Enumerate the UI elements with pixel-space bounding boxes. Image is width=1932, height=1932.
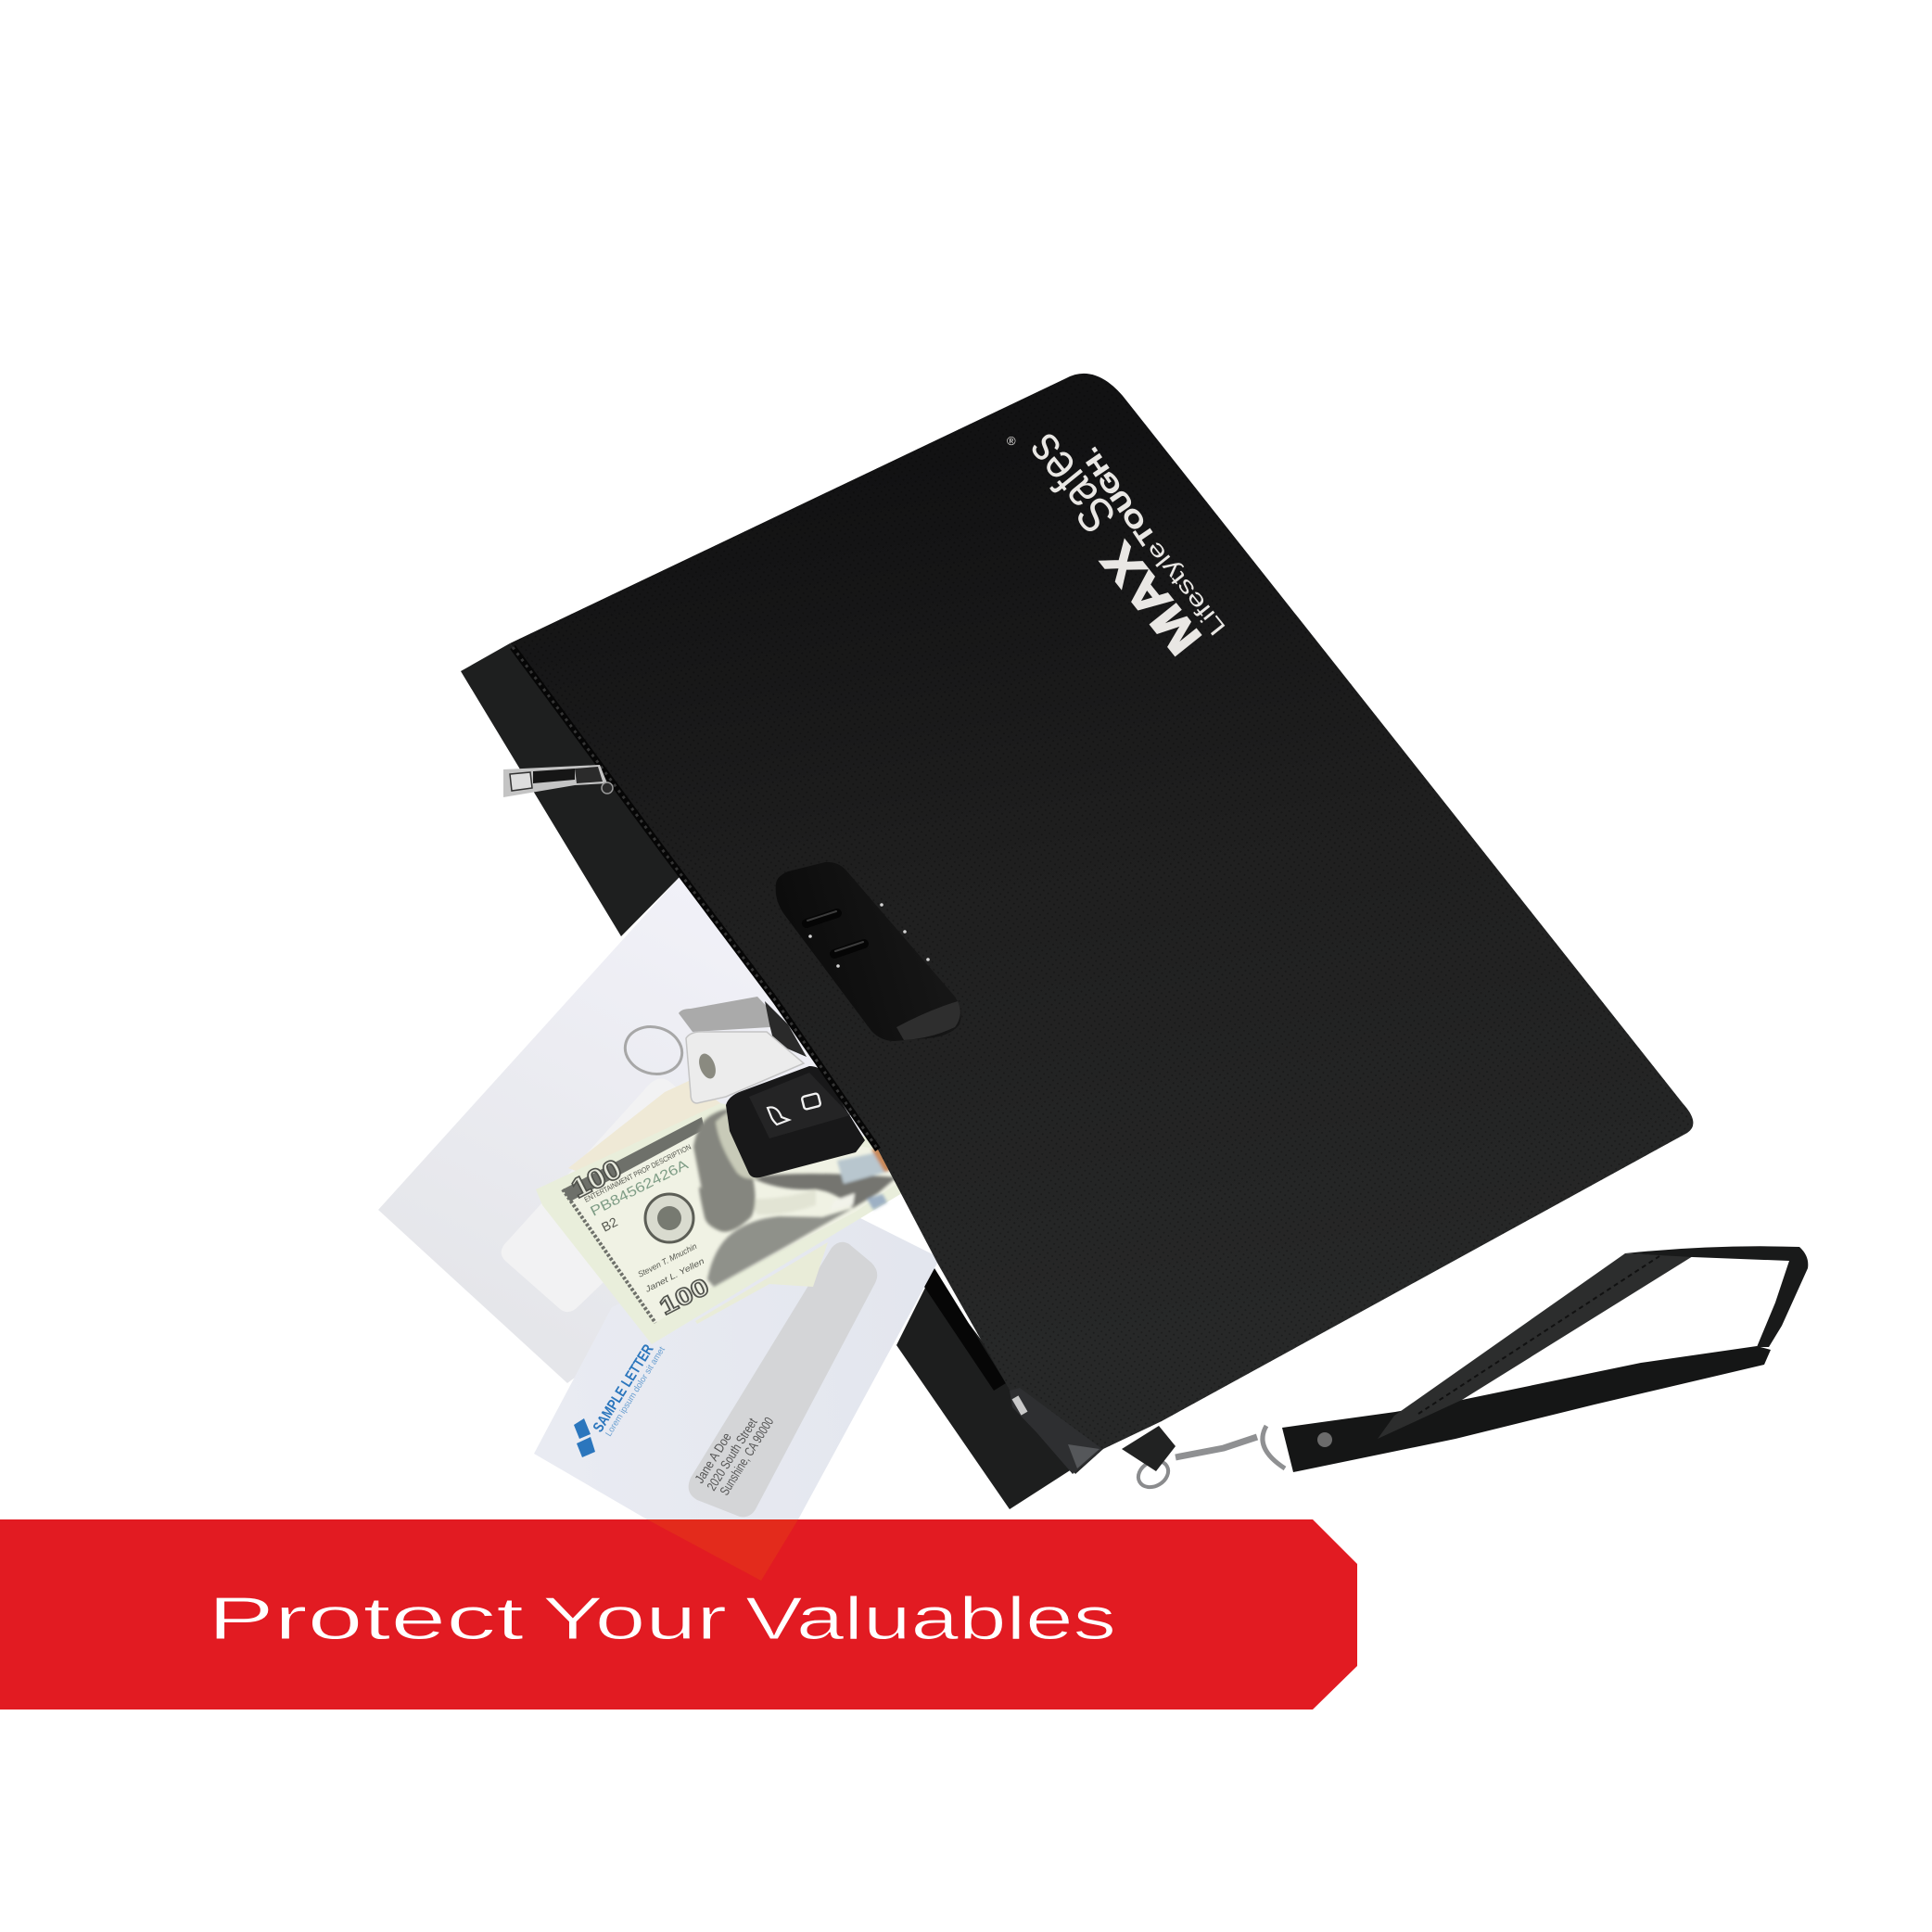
combination lock (776, 862, 961, 1041)
bill text: Steven T. Mnuchin (636, 1241, 698, 1279)
address window: Sunshine, CA 90000 (717, 1415, 777, 1498)
envelope ghost through banner (647, 1519, 798, 1581)
icon: sample letter logo (574, 1418, 595, 1457)
bill paper (536, 1103, 902, 1344)
MaxSafes logo (1007, 424, 1231, 665)
swivel clasp (1134, 1426, 1285, 1493)
bill print area (563, 1122, 896, 1323)
bill text: PB84562426A (588, 1157, 691, 1220)
address window (689, 1242, 877, 1517)
upper zipper pull (503, 765, 613, 797)
portrait on bill (693, 1109, 896, 1287)
bill text (566, 1143, 714, 1320)
strap upper strand (1378, 1253, 1693, 1439)
bill text: 100 (655, 1272, 714, 1320)
bill seal (645, 1194, 693, 1242)
bill text: ENTERTAINMENT PROP DESCRIPTION (583, 1143, 693, 1204)
MaxSafes logo: MAX (1091, 532, 1212, 665)
key fob (726, 1066, 865, 1177)
MaxSafes logo: ® (1007, 434, 1016, 448)
address window: 2020 South Street (704, 1416, 760, 1493)
strap loop end (1625, 1246, 1808, 1347)
banner title: Protect (208, 1584, 524, 1652)
bill text: 100 (566, 1153, 627, 1204)
banner title: Valuables (745, 1584, 1116, 1652)
folded cash (536, 1080, 902, 1344)
pouch strap tab (1122, 1426, 1176, 1471)
keys and ring (620, 997, 807, 1103)
rear envelope (378, 877, 890, 1383)
icon: strap rivet (1317, 1432, 1332, 1447)
banner title: Your (542, 1584, 727, 1652)
lower note (695, 1242, 828, 1324)
wrist strap (1122, 1246, 1808, 1493)
front envelope (534, 1205, 940, 1519)
banner title (208, 1584, 1116, 1652)
sample letter heading: SAMPLE LETTER (591, 1341, 657, 1435)
MaxSafes logo: Lifestyle (1140, 537, 1231, 641)
top print strip (563, 1117, 705, 1201)
pouch front body (510, 374, 1693, 1474)
strap lower strand (1282, 1346, 1771, 1472)
sample letter heading: Lorem ipsum dolor sit amet (604, 1344, 667, 1439)
address window: Jane A Doe (692, 1430, 734, 1486)
MaxSafes logo: TOUGH. (1077, 442, 1161, 549)
zipper teeth (513, 647, 878, 1150)
left print edge (563, 1189, 655, 1323)
beige note behind (568, 1080, 732, 1177)
lower zipper pull (1010, 1388, 1102, 1474)
banner (0, 1519, 1357, 1710)
MaxSafes logo: Safes (1014, 424, 1126, 543)
bill text: B2 (599, 1214, 620, 1235)
bill text: Janet L. Yellen (642, 1256, 705, 1294)
back panel of pouch (461, 643, 1103, 1509)
